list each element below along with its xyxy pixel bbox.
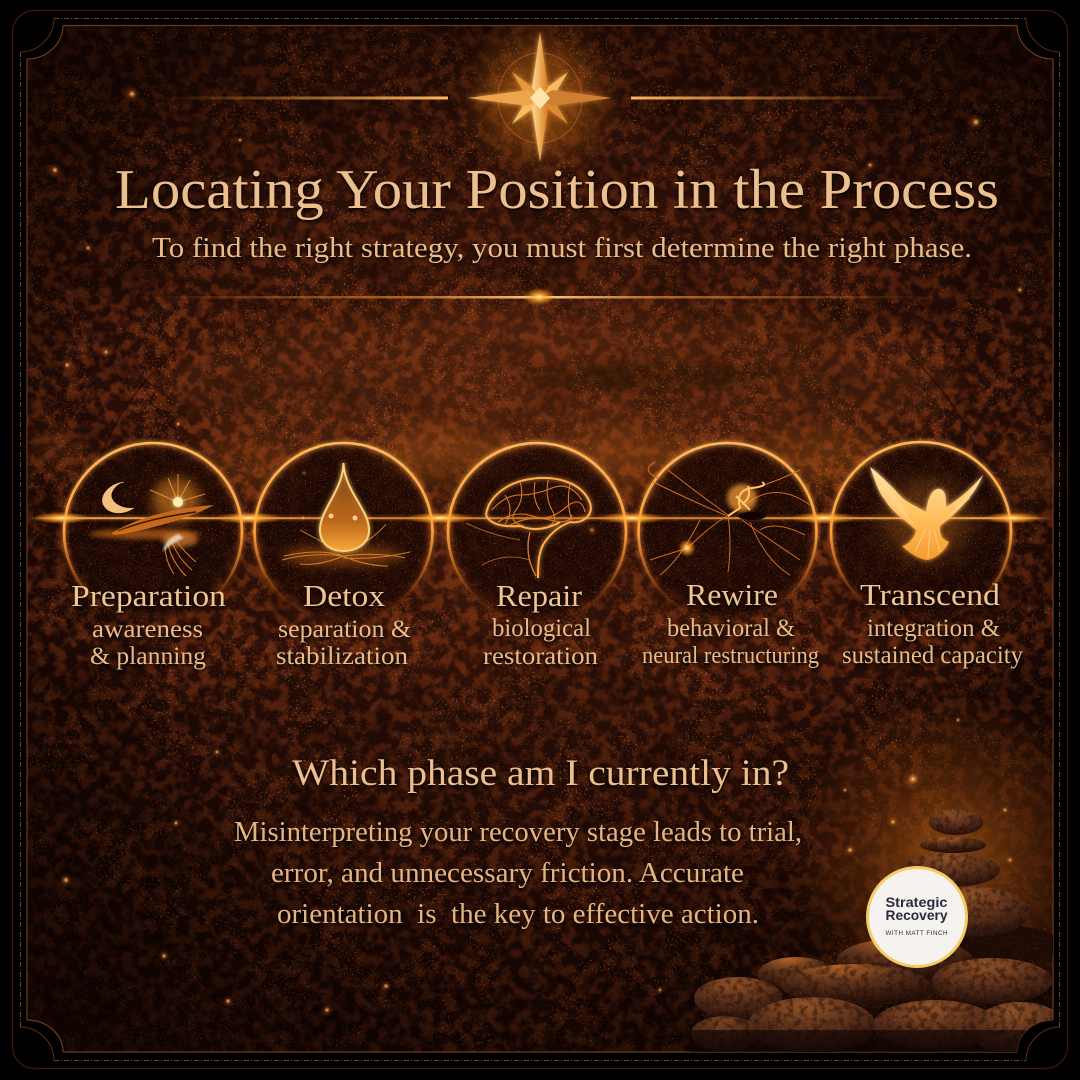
icon: neural network — [648, 462, 810, 575]
phase labels — [71, 577, 1023, 670]
circle rings — [64, 442, 1011, 622]
icon: water drop — [282, 463, 410, 566]
label: Detox: stabilization — [276, 643, 409, 670]
label: Rewire: behavioral & — [667, 615, 795, 642]
icon: brain — [466, 478, 598, 578]
label: Preparation: awareness — [92, 616, 203, 643]
question heading: Which phase am I currently in? — [292, 753, 789, 794]
label: Repair: biological — [492, 615, 591, 642]
label: Detox: separation & — [278, 616, 411, 643]
body paragraph: orientation is the key to effective action. — [277, 899, 759, 930]
label: Detox: Detox — [303, 578, 386, 613]
horizontal beam — [28, 512, 1052, 524]
circle interiors — [64, 442, 1011, 622]
label: Rewire — [642, 577, 819, 669]
large faint map arcs — [90, 350, 990, 810]
icon: dove — [870, 467, 983, 560]
label: Transcend: Transcend — [860, 577, 1001, 612]
phase circles row — [28, 426, 1058, 622]
body paragraph — [234, 817, 802, 930]
glow behind circles — [30, 426, 1058, 500]
icon: crescent moon and galaxy — [89, 474, 214, 576]
label: Repair: restoration — [483, 643, 599, 670]
logo text: Strategic — [886, 894, 948, 910]
logo badge — [868, 868, 966, 966]
right rule — [631, 96, 901, 100]
subtitle: To find the right strategy, you must first determine the right phase. — [152, 232, 972, 264]
stacked stones — [690, 800, 1068, 1058]
label: Repair: Repair — [496, 578, 583, 613]
scattered stars — [48, 86, 1025, 1016]
label: Preparation: Preparation — [71, 578, 227, 613]
circle speckles — [60, 440, 1020, 620]
divider with glow — [150, 288, 930, 306]
label: Transcend — [842, 577, 1023, 669]
label: Rewire: neural restructuring — [642, 643, 819, 669]
label: Preparation — [71, 578, 227, 670]
logo text: Recovery — [886, 907, 948, 923]
logo text — [886, 894, 948, 937]
left rule — [165, 96, 448, 100]
label: Repair — [483, 578, 599, 670]
body paragraph: Misinterpreting your recovery stage leads to trial, — [234, 817, 802, 848]
label: Detox — [276, 578, 411, 670]
title: Locating Your Position in the Process — [115, 159, 999, 221]
label: Preparation: & planning — [90, 643, 207, 670]
top compass star ornament — [165, 32, 901, 162]
body paragraph: error, and unnecessary friction. Accurate — [271, 858, 744, 889]
logo text: WITH MATT FINCH — [886, 930, 948, 937]
label: Transcend: sustained capacity — [842, 642, 1023, 669]
label: Rewire: Rewire — [686, 577, 778, 612]
label: Transcend: integration & — [867, 615, 1000, 642]
